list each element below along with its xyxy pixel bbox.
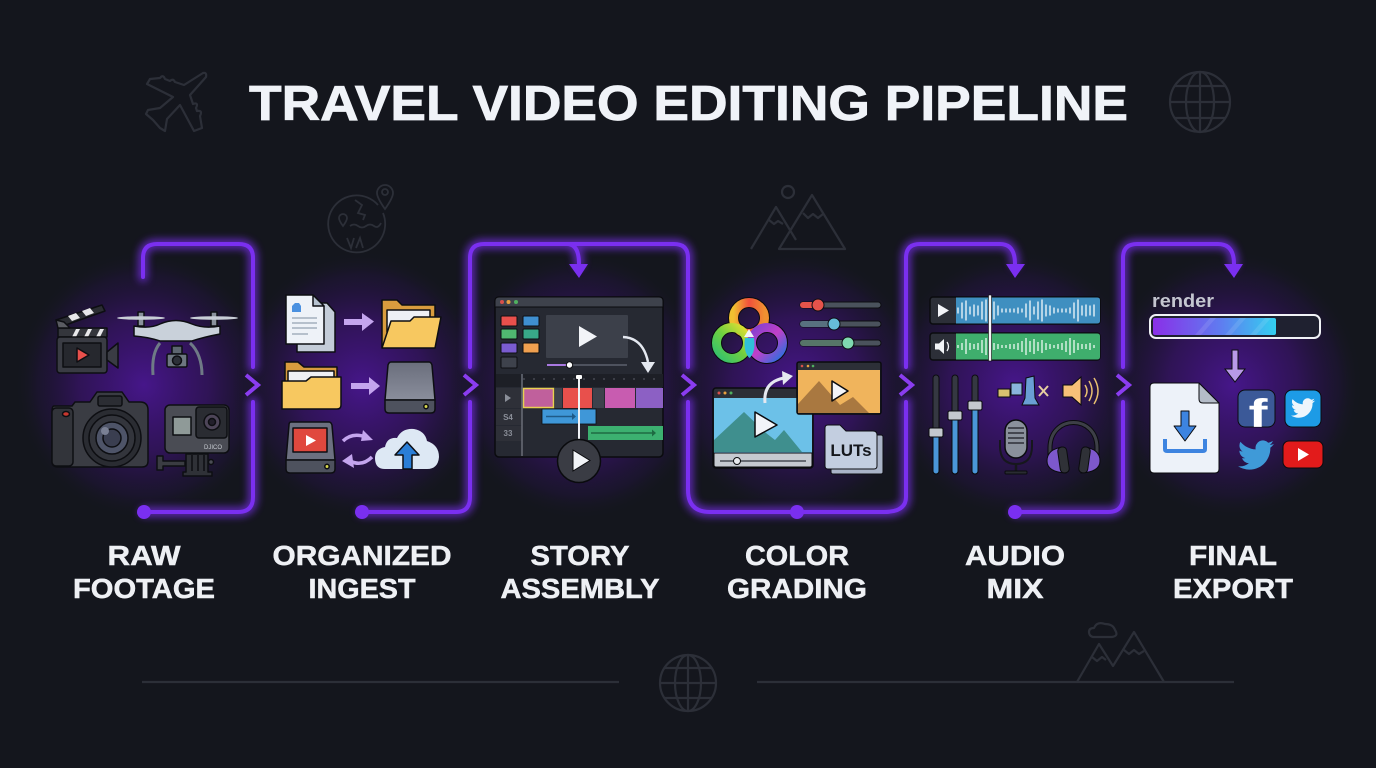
panel: story assembly editor: S4 [503, 413, 513, 422]
icon: bottom mountains with cloud [1077, 623, 1164, 682]
label: final export: FINAL [1189, 540, 1277, 571]
icon: mic mute widget [998, 376, 1048, 405]
curved arrow [623, 337, 648, 362]
purple glow backdrops [14, 250, 1363, 520]
icon: globe top right [1170, 72, 1230, 132]
playhead [988, 295, 992, 361]
icon: hard drive [385, 362, 435, 413]
orange video window [797, 362, 881, 414]
icon: speaker [1063, 377, 1098, 405]
icon: youtube [1283, 441, 1323, 468]
icon: microphone [1000, 420, 1032, 474]
media swatches [501, 316, 539, 368]
icon: color wheel rings [716, 302, 782, 358]
flow connector lines [143, 244, 1234, 512]
audio track blue [930, 297, 1100, 324]
icon: twitter bird [1238, 440, 1274, 470]
icon: globe with map pin [328, 185, 393, 252]
icon: clapper video camera [56, 305, 118, 373]
icon: airplane [146, 73, 206, 131]
render label: render [1152, 290, 1214, 311]
icon: drone [117, 312, 238, 375]
title: TRAVEL VIDEO EDITING PIPELINE [249, 77, 1128, 131]
icon: media drive [286, 422, 335, 473]
label: organized ingest: INGEST [308, 573, 416, 604]
icon: sync arrows [342, 430, 373, 468]
label: color grading: COLOR [745, 540, 849, 571]
label: raw footage: FOOTAGE [73, 573, 215, 604]
label: story assembly: ASSEMBLY [500, 573, 660, 604]
icon: bottom globe [660, 655, 716, 711]
label: raw footage: RAW [108, 540, 181, 571]
icon: folder [282, 362, 341, 409]
panel: story assembly editor: 33 [504, 429, 513, 438]
preview pane [546, 315, 628, 358]
icon: documents [286, 295, 335, 352]
icon: down arrow [1225, 350, 1245, 382]
playhead [578, 376, 580, 442]
render progress bar [1150, 315, 1320, 338]
icon: DSLR camera [52, 392, 148, 467]
icon: open folder [382, 300, 441, 348]
curved arrow between windows [765, 378, 784, 403]
icon: headphones [1047, 422, 1100, 473]
editor window [495, 297, 663, 457]
track headers [496, 388, 522, 408]
icon: action camera: DJICO [204, 445, 222, 451]
bottom divider lines [142, 681, 1234, 683]
label: color grading: GRADING [727, 573, 867, 604]
faders [929, 375, 982, 474]
label: final export: EXPORT [1173, 573, 1293, 604]
label: story assembly: STORY [530, 540, 630, 571]
panel: story assembly editor [495, 297, 663, 482]
panel: final export icons [1150, 290, 1323, 473]
panel: organized ingest icons [282, 295, 441, 473]
timeline ruler [496, 374, 663, 387]
step chevrons [246, 375, 1129, 395]
icon: LUTs folder [825, 425, 883, 474]
icon: twitter square [1285, 390, 1321, 427]
icon: cloud upload [375, 429, 439, 469]
audio track green [930, 333, 1100, 360]
color sliders [800, 299, 881, 349]
icon: facebook: f [1248, 392, 1268, 436]
icon: facebook [1238, 390, 1275, 436]
step labels [73, 540, 1293, 604]
label: audio mix: MIX [986, 573, 1044, 604]
icon: export file [1150, 383, 1219, 473]
icon: arrow to drive [351, 377, 380, 395]
label: audio mix: AUDIO [965, 540, 1065, 571]
panel: color grading icons [713, 299, 883, 474]
panel: audio mix icons [929, 295, 1100, 474]
icon: mountains with sun [751, 186, 845, 249]
icon: arrow to folder [344, 313, 374, 331]
blue video window [713, 388, 813, 468]
icon: LUTs folder: LUTs [830, 441, 872, 460]
label: organized ingest: ORGANIZED [272, 540, 452, 571]
timeline clips [524, 388, 554, 408]
play button [558, 440, 600, 482]
panel: raw footage icons [52, 305, 238, 476]
icon: action camera [157, 405, 229, 476]
connector arrowheads and dots [137, 264, 1243, 519]
